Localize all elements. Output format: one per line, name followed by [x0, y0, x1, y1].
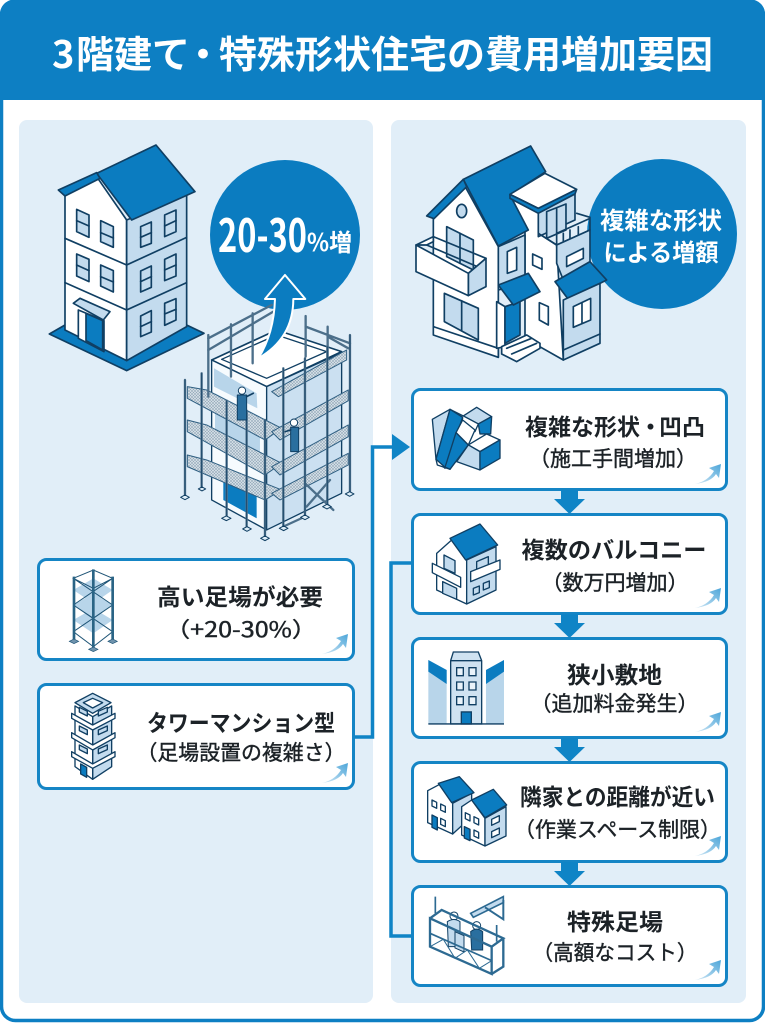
card: close to neighbouring house: 隣家との距離が近い — [520, 784, 715, 810]
circle badge: complex shape surcharge: による増額 — [604, 240, 718, 267]
connector: tower card to right column — [354, 447, 396, 737]
icon: corner arrow — [695, 464, 721, 484]
icon: house with balconies — [432, 524, 500, 604]
title: ・ — [184, 24, 222, 79]
card: tower mansion type — [38, 684, 354, 788]
icon: corner arrow — [695, 836, 721, 856]
card: complex shape and unevenness: ・ — [639, 414, 662, 440]
card: close to neighbouring house: （作業スペース制限） — [514, 814, 721, 844]
circle badge: 20-30% increase — [210, 160, 360, 310]
card: tower mansion type: タワーマンション型 — [147, 710, 335, 736]
circle badge: complex shape surcharge — [587, 159, 737, 309]
icon: corner arrow — [695, 588, 721, 608]
circle badge: 20-30% increase: %増 — [307, 223, 352, 258]
card: multiple balconies: 複数のバルコニー — [522, 537, 706, 563]
icon: corner arrow — [695, 960, 721, 980]
illustration: complex-shaped house — [416, 146, 607, 362]
card: tall scaffolding: 高い足場が必要 — [157, 584, 323, 610]
arrow: down — [554, 490, 585, 514]
icon: corner arrow — [695, 712, 721, 732]
circle badge: 20-30% increase: 20-30 — [218, 200, 307, 266]
card: tower mansion type: （足場設置の複雑さ） — [136, 737, 346, 767]
card: complex shape and unevenness: （施工手間増加） — [529, 443, 697, 473]
illustration: building with scaffolding — [181, 305, 354, 541]
circle badge: complex shape surcharge: 複雑な形状 — [600, 208, 722, 235]
card: special scaffolding: 特殊足場 — [567, 909, 663, 935]
icon: interlocking blocks — [432, 407, 500, 470]
card: tall scaffolding: （+20-30%） — [165, 614, 317, 644]
panel: left, three-storey buildings — [19, 120, 373, 1003]
card: narrow site — [412, 638, 726, 738]
icon: tower block — [72, 693, 115, 779]
icon: suspended gondola — [430, 897, 503, 974]
card: complex shape and unevenness — [412, 390, 726, 490]
scaffold decks — [187, 387, 348, 500]
icon: scaffold tower — [69, 569, 117, 652]
card: complex shape and unevenness: 複雑な形状 — [525, 414, 640, 440]
panel: right, special shapes — [391, 120, 746, 1003]
arrow: down — [554, 738, 585, 762]
card: narrow site: （追加料金発生） — [530, 688, 698, 718]
card: multiple balconies — [412, 514, 726, 614]
arrow: upward through circle — [258, 275, 305, 358]
card: special scaffolding: （高額なコスト） — [532, 937, 698, 967]
icon: narrow site building — [428, 652, 504, 724]
icon: corner arrow — [322, 763, 348, 783]
card: multiple balconies: （数万円増加） — [542, 567, 688, 597]
header band — [0, 0, 765, 100]
icon: corner arrow — [322, 634, 348, 654]
card: close to neighbouring house — [412, 762, 726, 862]
arrow: down — [554, 614, 585, 638]
connector: balcony card to special scaffold card — [391, 563, 412, 936]
card: special scaffolding — [412, 886, 726, 986]
arrowhead: into first right card — [392, 434, 410, 460]
title: 3 — [52, 24, 74, 79]
scaffold posts — [185, 305, 350, 537]
illustration: three-storey house — [49, 145, 204, 371]
title: 特殊形状住宅の費用増加要因 — [219, 24, 713, 79]
card: tall scaffolding — [38, 560, 354, 660]
arrow: down — [554, 862, 585, 886]
card: complex shape and unevenness: 凹凸 — [659, 414, 705, 440]
title: 階建て — [76, 24, 190, 79]
workers — [237, 387, 299, 452]
icon: two adjacent houses — [428, 777, 507, 846]
card: narrow site: 狭小敷地 — [567, 662, 662, 688]
